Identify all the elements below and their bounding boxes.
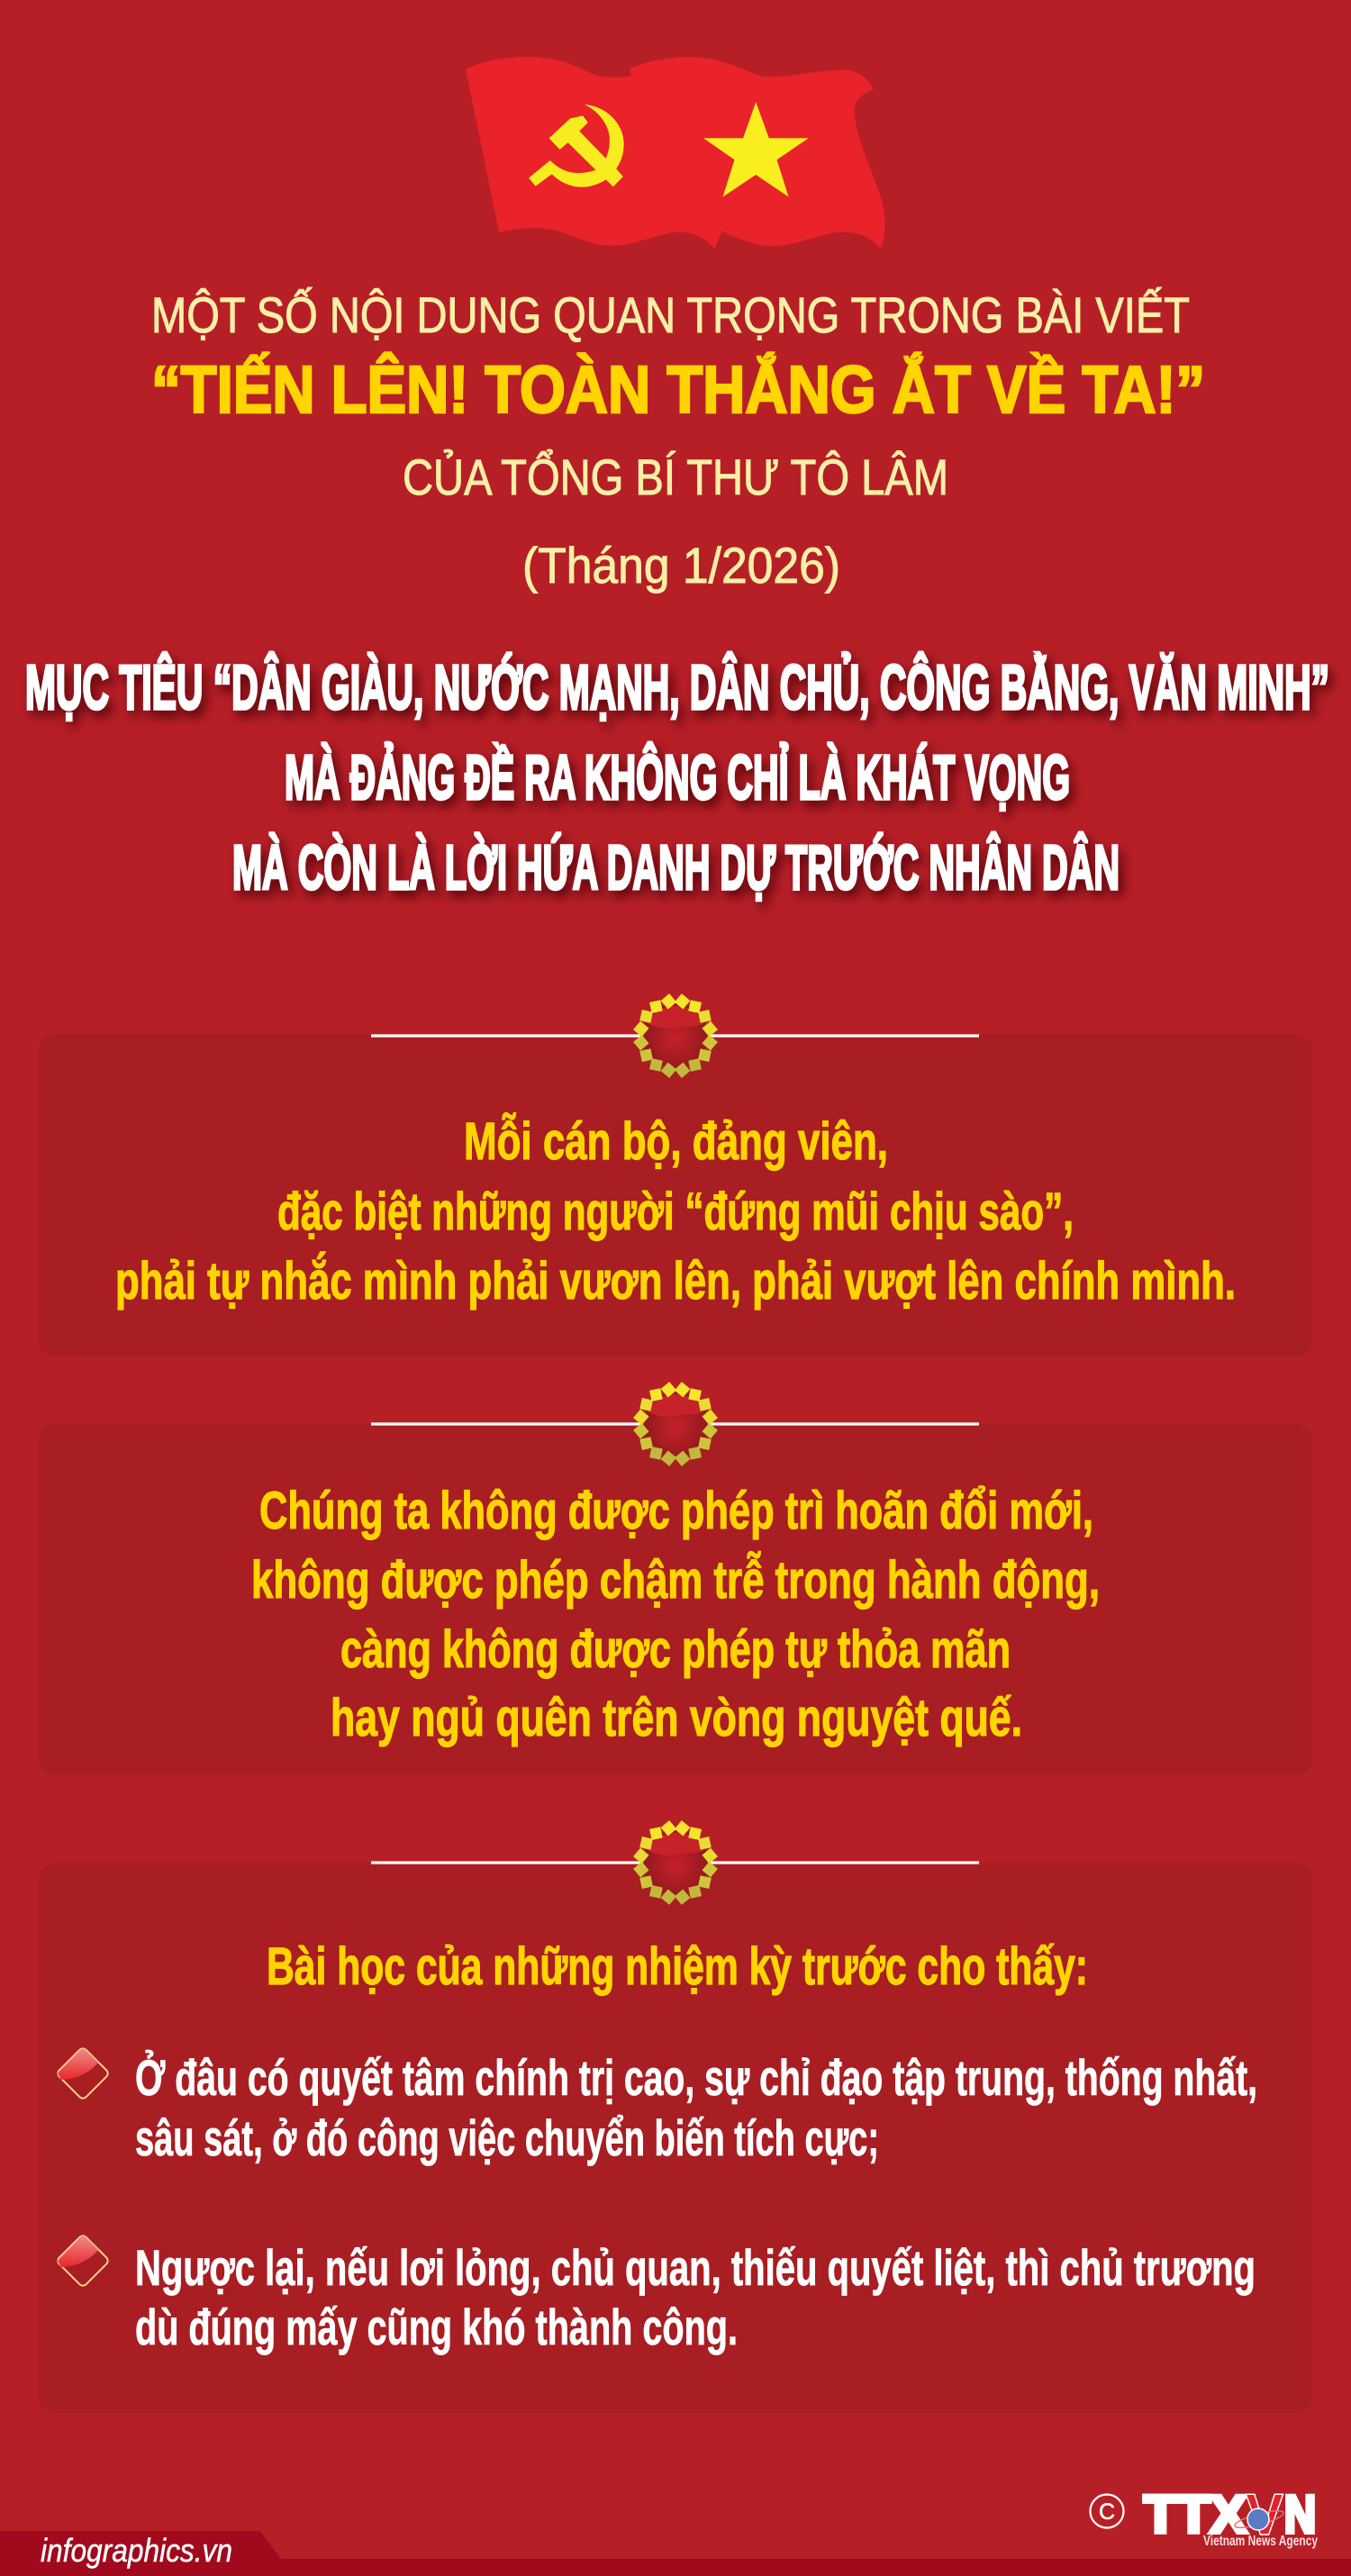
copyright mark bbox=[1090, 2495, 1124, 2527]
date: (Tháng 1/2026) bbox=[522, 537, 840, 594]
panel heading: Bài học của những nhiệm kỳ trước cho thấy: bbox=[267, 1937, 1088, 1996]
icon: gold star bbox=[703, 102, 809, 197]
panel: no delay bbox=[39, 1424, 1312, 1775]
flag cloth bbox=[466, 57, 885, 249]
icon: waving party and national flag bbox=[466, 57, 885, 249]
logo letter N: N bbox=[1284, 2486, 1316, 2544]
logo globe bbox=[1247, 2508, 1269, 2530]
bullet text 2 bbox=[135, 2239, 1256, 2355]
panel text: hay ngủ quên trên vòng nguyệt quế. bbox=[331, 1689, 1022, 1747]
bullet text 1: sâu sát, ở đó công việc chuyển biến tích cực; bbox=[135, 2109, 879, 2166]
bullet text 2: dù đúng mấy cũng khó thành công. bbox=[135, 2299, 738, 2355]
panel text: đặc biệt những người “đứng mũi chịu sào”, bbox=[277, 1183, 1074, 1241]
footer band bbox=[0, 2531, 1351, 2576]
panel text: Chúng ta không được phép trì hoãn đổi mới, bbox=[259, 1482, 1093, 1540]
title line 1: MỘT SỐ NỘI DUNG QUAN TRỌNG TRONG BÀI VIẾT bbox=[151, 286, 1190, 343]
panel background bbox=[39, 1863, 1312, 2413]
logo: TTXVN bbox=[1090, 2481, 1318, 2549]
panel background bbox=[39, 1034, 1312, 1356]
panel text bbox=[251, 1482, 1100, 1747]
panel: lessons bbox=[39, 1863, 1312, 2413]
panel text: không được phép chậm trễ trong hành động, bbox=[251, 1551, 1100, 1610]
bullet text 1 bbox=[135, 2049, 1257, 2166]
panel: cadres bbox=[39, 1034, 1312, 1356]
title line 3: CỦA TỔNG BÍ THƯ TÔ LÂM bbox=[403, 449, 948, 505]
panel background bbox=[39, 1424, 1312, 1775]
panel text: Mỗi cán bộ, đảng viên, bbox=[464, 1112, 888, 1171]
logo letters TTX: TTX bbox=[1144, 2486, 1247, 2544]
bullet icon 1 bbox=[56, 2046, 110, 2100]
copyright mark: C bbox=[1099, 2499, 1115, 2525]
logo letter V: V bbox=[1246, 2481, 1283, 2547]
ornament 1 bbox=[371, 993, 979, 1078]
headline statement bbox=[25, 651, 1329, 903]
footer website: infographics.vn bbox=[41, 2532, 232, 2569]
logo orbit bbox=[1233, 2508, 1285, 2531]
panel text: càng không được phép tự thỏa mãn bbox=[340, 1620, 1011, 1679]
ornament 2 bbox=[371, 1382, 979, 1466]
ornament 3 bbox=[371, 1820, 979, 1905]
title block bbox=[151, 286, 1205, 594]
bullet icon 2 bbox=[56, 2234, 110, 2288]
icon: hammer and sickle bbox=[529, 104, 624, 187]
panel text bbox=[115, 1112, 1236, 1311]
main title quote: “TIẾN LÊN! TOÀN THẮNG ẮT VỀ TA!” bbox=[151, 352, 1205, 427]
